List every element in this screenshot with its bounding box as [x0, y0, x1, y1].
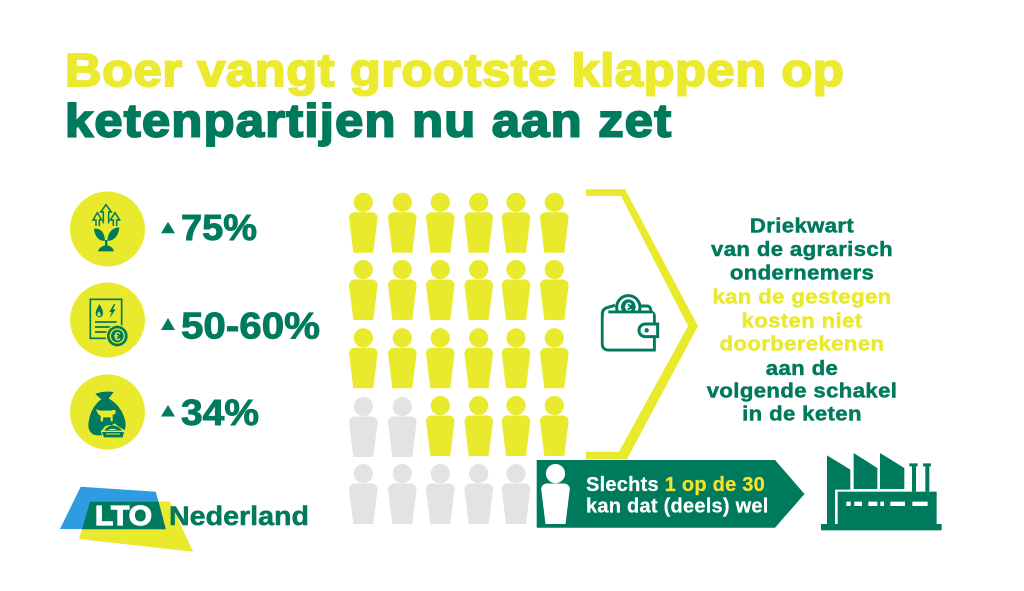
- value: 75%: [181, 207, 257, 248]
- conclusion text: doorberekenen: [720, 332, 884, 356]
- conclusion text: van de agrarisch: [711, 238, 893, 261]
- icon: energy bill: €: [114, 329, 121, 343]
- conclusion text: [707, 214, 897, 426]
- logo blue shape: [60, 487, 166, 529]
- icon: feed bag with cow: [70, 374, 145, 450]
- conclusion text: in de keten: [742, 402, 862, 426]
- title line 2: ketenpartijen nu aan zet: [65, 96, 671, 147]
- icon: energy bill: [70, 282, 145, 358]
- stat: 50-60%: [70, 282, 320, 358]
- value: 34%: [181, 392, 259, 433]
- logo green box: [82, 502, 166, 529]
- logo: LTO Nederland: [60, 487, 309, 552]
- stat: 75%: [70, 192, 257, 266]
- icon: plant with arrows: [70, 192, 145, 266]
- banner text line 2: kan dat (deels) wel: [586, 496, 769, 518]
- logo Nederland: Nederland: [169, 501, 309, 531]
- logo LTO: LTO: [95, 500, 152, 531]
- title line 1: Boer vangt grootste klappen op: [65, 45, 844, 96]
- triangle: [161, 405, 175, 416]
- conclusion text: kosten niet: [741, 309, 863, 332]
- white person: [541, 464, 570, 524]
- banner text line 1: Slechts 1 op de 30: [586, 474, 765, 496]
- icon: factory: [821, 453, 942, 530]
- yellow people: [349, 193, 569, 456]
- triangle: [161, 222, 175, 233]
- conclusion text: kan de gestegen: [712, 285, 892, 308]
- conclusion text: aan de: [766, 357, 838, 380]
- conclusion text: volgende schakel: [707, 379, 897, 403]
- conclusion text: ondernemers: [730, 261, 874, 284]
- banner arrow: [537, 460, 804, 528]
- stat: 34%: [70, 374, 259, 450]
- logo yellow shape: [79, 502, 193, 552]
- banner: 1 op de 30: [537, 460, 804, 528]
- icon: wallet: €: [625, 300, 632, 314]
- grey people: [349, 397, 530, 524]
- triangle: [161, 318, 175, 330]
- conclusion text: Driekwart: [750, 214, 854, 238]
- pictogram: farmers: [349, 193, 569, 524]
- icon: wallet: [602, 296, 658, 350]
- chevron bracket: [586, 189, 698, 459]
- title: [65, 45, 844, 147]
- value: 50-60%: [181, 305, 320, 346]
